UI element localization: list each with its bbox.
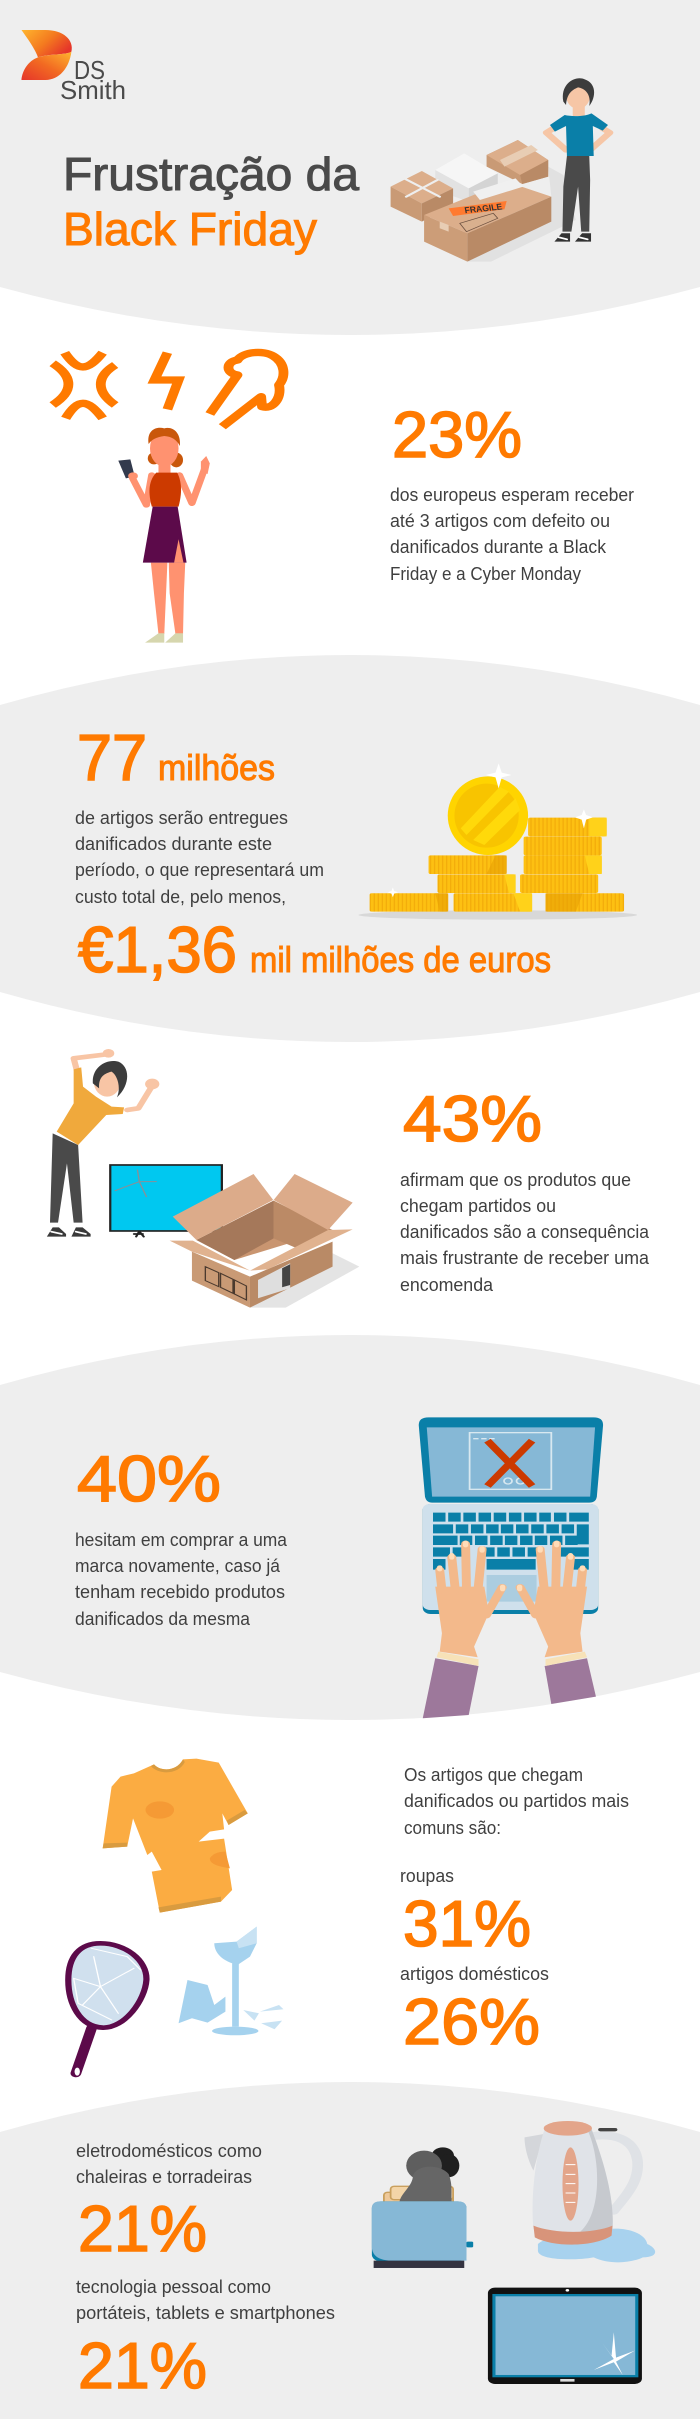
statistic block: clothes and household <box>400 1765 629 2058</box>
illustration: torn shirt <box>103 1759 248 1913</box>
statistic: 23%: dos europeus esperam receber <box>390 485 634 505</box>
statistic: 43%: chegam partidos ou <box>400 1196 556 1216</box>
illustration: cracked tablet <box>488 2288 642 2384</box>
illustration: woman with phone <box>118 428 210 643</box>
illustration: frustrated man with broken TV <box>47 1049 359 1308</box>
statistic: 23%: 23% <box>392 398 522 471</box>
statistic block: appliances and tech: eletrodomésticos como <box>76 2141 262 2161</box>
illustration: laptop with hands <box>419 1417 603 1718</box>
statistic block: clothes and household: danificados ou partidos mais <box>404 1791 629 1811</box>
icon: DS Smith logo: Smith <box>60 75 126 105</box>
statistic: 43%: danificados são a consequência <box>400 1222 650 1242</box>
background panel: 40% <box>0 1335 700 1720</box>
statistic: 43% <box>400 1082 650 1295</box>
illustration: broken glass <box>179 1927 283 2035</box>
icon: DS Smith logo: DS <box>74 55 105 85</box>
statistic block: clothes and household: 31% <box>403 1887 531 1960</box>
statistic block: appliances and tech: portáteis, tablets e smartphones <box>76 2303 335 2323</box>
statistic: 40%: hesitam em comprar a uma <box>75 1530 288 1550</box>
statistic block: appliances and tech <box>76 2141 335 2402</box>
statistic: 77 milhões <box>75 721 551 986</box>
statistic block: appliances and tech: chaleiras e torradeiras <box>76 2167 252 2187</box>
background panel: header <box>0 0 700 335</box>
statistic: 77 milhões: de artigos serão entregues <box>75 808 288 828</box>
illustration: parcels and standing man <box>391 78 610 262</box>
background panel: 77 milhões <box>0 655 700 1042</box>
statistic block: appliances and tech: 21% <box>78 2192 207 2265</box>
statistic: 77 milhões: milhões <box>158 747 275 788</box>
statistic: 23%: Friday e a Cyber Monday <box>390 564 581 584</box>
icon: anger symbols <box>53 352 283 427</box>
statistic: 40%: danificados da mesma <box>75 1609 251 1629</box>
statistic: 40%: marca novamente, caso já <box>75 1556 281 1576</box>
statistic block: appliances and tech: tecnologia pessoal como <box>76 2277 271 2297</box>
statistic: 77 milhões: período, o que representará um <box>75 860 324 880</box>
title: Frustração da <box>63 148 359 200</box>
icon: DS Smith logo <box>21 30 126 105</box>
statistic: 77 milhões: 77 <box>77 721 147 794</box>
statistic block: appliances and tech: 21% <box>78 2329 207 2402</box>
statistic block: clothes and household: 26% <box>403 1985 540 2058</box>
statistic: 43%: mais frustrante de receber uma <box>400 1248 650 1268</box>
statistic: 40%: 40% <box>77 1442 221 1515</box>
statistic block: clothes and household: Os artigos que chegam <box>404 1765 583 1785</box>
illustration: broken mirror <box>68 1943 146 2076</box>
statistic: 77 milhões: danificados durante este <box>75 834 272 854</box>
statistic: 40%: tenham recebido produtos <box>75 1582 285 1602</box>
statistic: 23%: danificados durante a Black <box>390 537 607 557</box>
statistic: 43%: afirmam que os produtos que <box>400 1170 631 1190</box>
illustration: gold coins <box>358 763 637 920</box>
statistic block: clothes and household: comuns são: <box>404 1818 501 1838</box>
background panel: footer <box>0 2082 700 2419</box>
illustration: leaking kettle <box>525 2121 655 2262</box>
illustration: burning toaster <box>372 2147 473 2268</box>
statistic block: clothes and household: artigos domésticos <box>400 1964 549 1984</box>
statistic: 23%: até 3 artigos com defeito ou <box>390 511 610 531</box>
statistic: 23% <box>390 398 634 584</box>
statistic: 43%: 43% <box>403 1082 542 1155</box>
statistic: 77 milhões: custo total de, pelo menos, <box>75 887 286 907</box>
illustration: parcels and standing man: FRAGILE <box>464 203 503 216</box>
statistic: 43%: encomenda <box>400 1275 494 1295</box>
statistic block: clothes and household: roupas <box>400 1866 454 1886</box>
statistic: 77 milhões: €1,36 <box>78 913 237 986</box>
statistic: 77 milhões: mil milhões de euros <box>250 939 551 980</box>
title <box>63 148 359 255</box>
title: Black Friday <box>63 203 317 255</box>
statistic: 40% <box>75 1442 288 1629</box>
